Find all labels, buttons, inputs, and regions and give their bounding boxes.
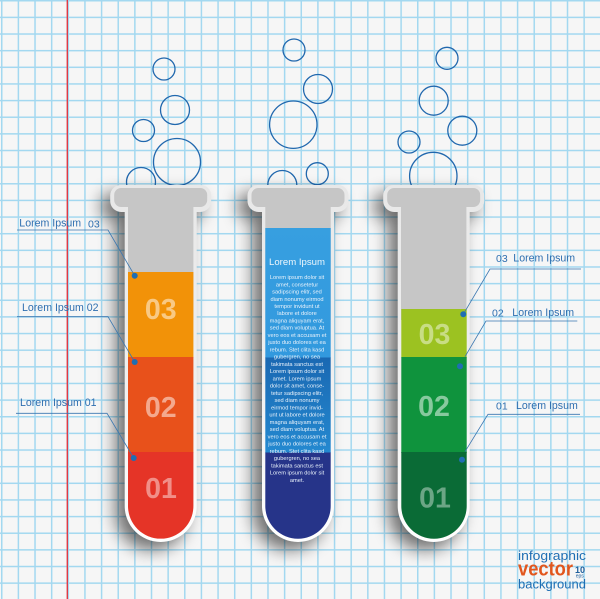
- test tube 3: 01: [419, 482, 451, 514]
- callout: right 02: 02: [492, 308, 504, 320]
- callout: right 03: 03: [496, 253, 508, 265]
- callout: right 03: [460, 253, 581, 317]
- paragraph text: gubergren, no sea: [274, 355, 321, 361]
- test tube 1: 02: [145, 392, 177, 424]
- test tube 2: [238, 185, 348, 550]
- paragraph text: justo duo dolores et ea: [267, 442, 327, 448]
- paragraph text: sadipscing elitr, sed: [272, 290, 322, 296]
- callout: left 02: Lorem Ipsum 02: [22, 302, 99, 314]
- paragraph text: sed diam nonumy: [275, 398, 320, 404]
- paragraph text: labore et dolore: [277, 311, 317, 317]
- paragraph text: magna aliquyam erat,: [270, 420, 325, 426]
- watermark logo: 10: [575, 565, 585, 575]
- callout: left 03: Lorem Ipsum: [19, 218, 81, 230]
- paragraph text: tetur sadipscing elitr,: [271, 391, 323, 397]
- paragraph text: vero eos et accusam et: [268, 434, 327, 440]
- callout: right 01: [459, 400, 580, 463]
- callout: left 03: [17, 218, 138, 279]
- callout: left 01: [16, 397, 137, 461]
- paragraph text: Lorem ipsum dolor sit: [270, 369, 325, 375]
- paragraph text: eirmod tempor invid-: [271, 406, 323, 412]
- callout: right 01: 01: [496, 400, 508, 412]
- paragraph text: vero eos et accusam et: [268, 333, 327, 339]
- test tube 1: [101, 185, 211, 550]
- callout: right 01: Lorem Ipsum: [516, 400, 578, 412]
- paragraph text: dolor sit amet, conse-: [270, 384, 324, 390]
- paragraph text: sed diam voluptua. At: [270, 427, 325, 433]
- text: lorem ipsum heading: Lorem Ipsum: [269, 257, 325, 268]
- callout: left 03: 03: [88, 218, 100, 230]
- paragraph text: diam nonumy eirmod: [270, 297, 324, 303]
- callout: left 02: [17, 302, 138, 365]
- paragraph text: tempor invidunt ut: [274, 304, 320, 310]
- watermark logo: background: [518, 576, 586, 591]
- paragraph text: Lorem ipsum dolor sit: [270, 471, 325, 477]
- paragraph text: rebum. Stet clita kasd: [270, 348, 324, 354]
- bubbles: tube 2: [268, 39, 332, 200]
- test tube 3: [374, 185, 484, 550]
- paragraph text: takimata sanctus est: [271, 464, 323, 470]
- red margin line: [67, 0, 68, 599]
- test tube 1: 01: [145, 473, 177, 505]
- paragraph text: amet. Lorem ipsum: [273, 376, 322, 382]
- test tube 3: 02: [418, 391, 450, 423]
- bubbles: tube 3: [398, 47, 477, 200]
- paragraph text: sed diam voluptua. At: [270, 326, 325, 332]
- callout: right 02: [457, 307, 577, 369]
- paragraph text: takimata sanctus est: [271, 362, 323, 368]
- paragraph text: justo duo dolores et ea: [267, 340, 327, 346]
- callout: right 02: Lorem Ipsum: [512, 307, 574, 319]
- bubbles: tube 1: [126, 58, 200, 196]
- paragraph text: [267, 275, 327, 484]
- paragraph text: amet, consetetur: [276, 282, 318, 288]
- paragraph text: amet.: [290, 478, 305, 484]
- watermark logo: eps: [576, 574, 584, 580]
- paragraph text: magna aliquyam erat,: [270, 318, 325, 324]
- test tube 1: 03: [145, 294, 177, 326]
- paragraph text: rebum. Stet clita kasd: [270, 449, 324, 455]
- paragraph text: unt ut labore et dolore: [269, 413, 325, 419]
- callout: left 01: Lorem Ipsum 01: [20, 397, 97, 409]
- paragraph text: Lorem ipsum dolor sit: [270, 275, 325, 281]
- watermark logo: infographic: [518, 548, 587, 563]
- test tube 3: 03: [419, 319, 450, 351]
- callout: right 03: Lorem Ipsum: [513, 253, 575, 265]
- watermark logo: [518, 548, 587, 591]
- watermark logo: vector: [518, 558, 573, 580]
- paragraph text: gubergren, no sea: [274, 456, 321, 462]
